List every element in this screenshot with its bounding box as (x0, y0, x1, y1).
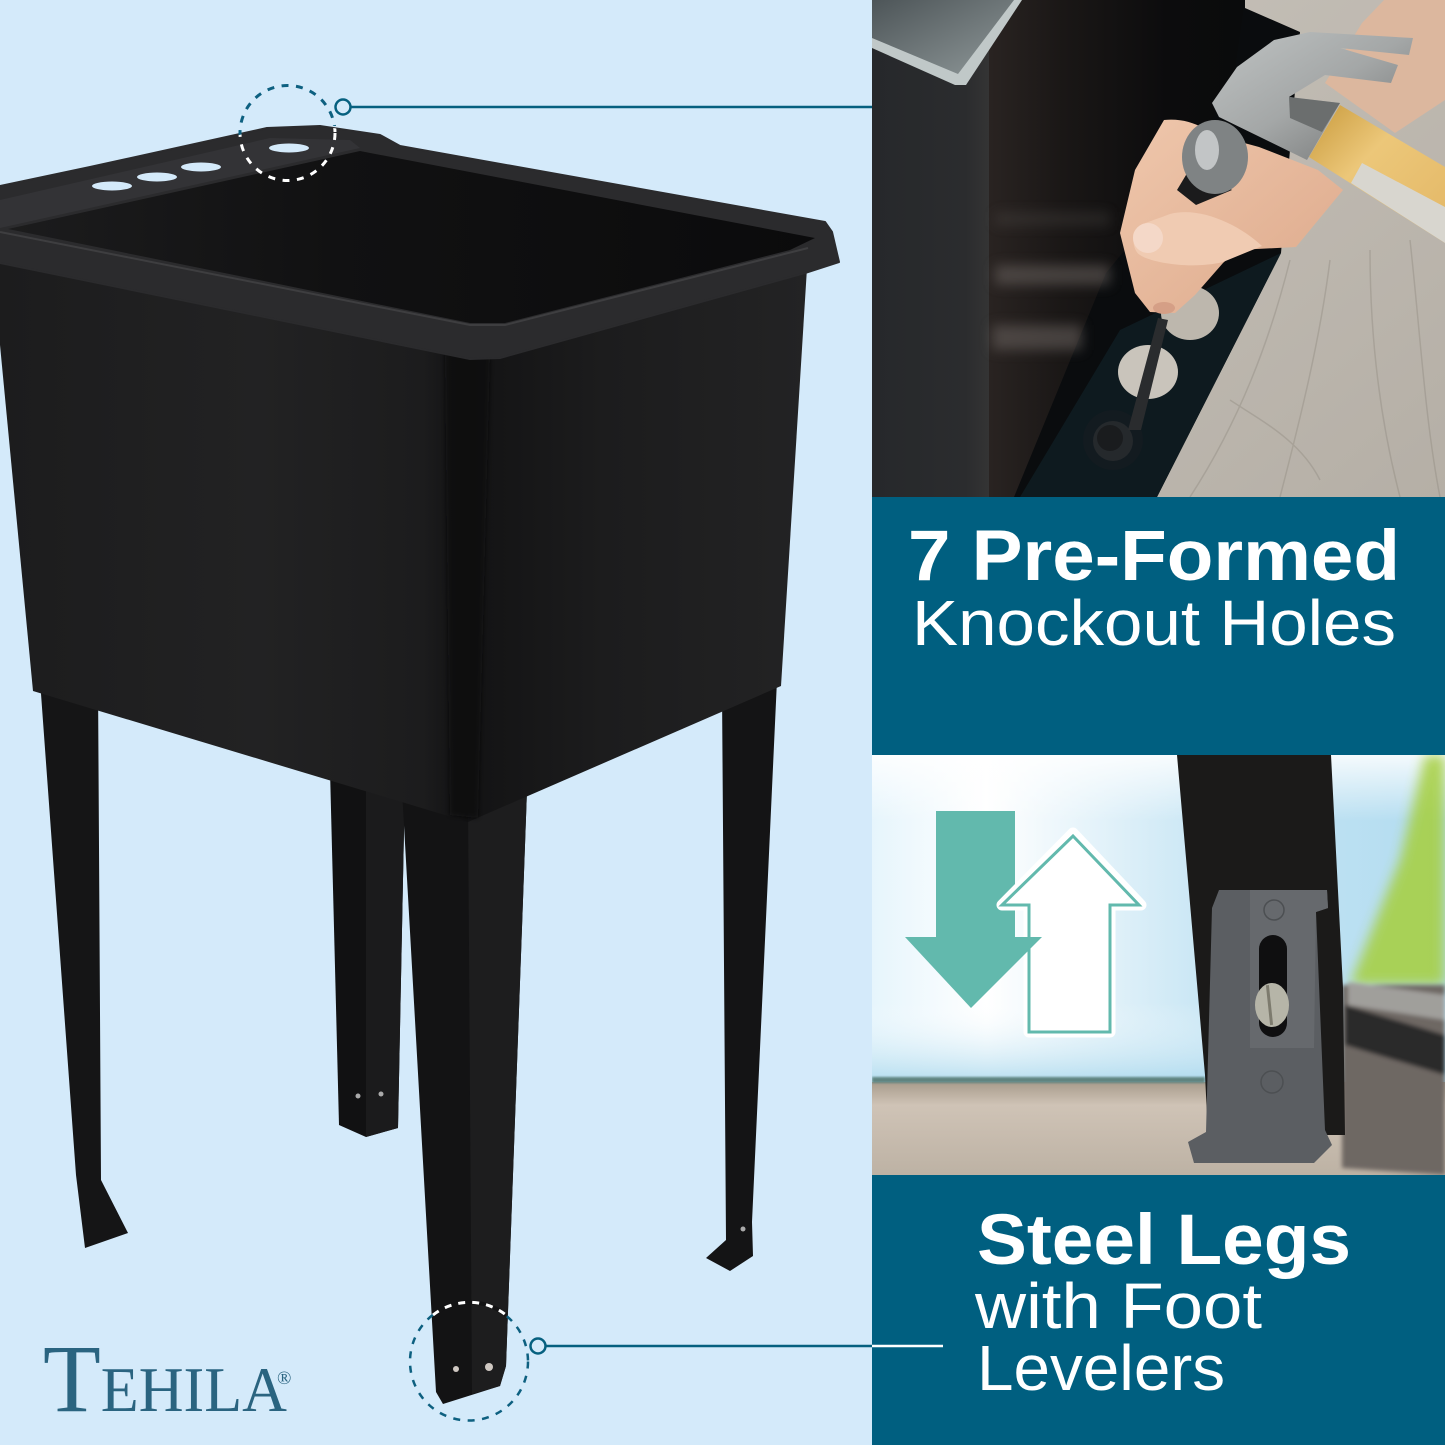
basin inner lip (0, 232, 808, 325)
forearm (1325, 0, 1445, 133)
logo: Tehila: TEHILA (43, 1325, 287, 1432)
cloth (1342, 982, 1445, 1175)
handle label (1351, 163, 1445, 243)
wood grain (1190, 240, 1440, 497)
green grass (1350, 755, 1445, 985)
finger nail (1153, 302, 1175, 314)
callout: top dashed circle (240, 86, 335, 180)
panel: steel legs (872, 1175, 1445, 1445)
subheading: with Foot: with Foot (974, 1270, 1262, 1342)
left leg (40, 680, 128, 1248)
thumb nail (1133, 223, 1163, 253)
panel: knockout holes (872, 497, 1445, 755)
right leg (706, 680, 777, 1271)
rear left leg (330, 770, 405, 1137)
sink product photo (0, 126, 839, 1404)
subheading: Levelers: Levelers (977, 1332, 1225, 1404)
icon: up arrow (1002, 833, 1141, 1032)
basin interior (8, 151, 815, 323)
white connector over panel (872, 1345, 943, 1347)
left post face (872, 0, 989, 497)
chisel handle (1177, 174, 1232, 205)
galvanized corner (872, 0, 1022, 85)
front leg (402, 790, 527, 1404)
logo: registered mark: ® (277, 1368, 291, 1389)
post reflections (992, 212, 1110, 350)
heading: 7 Pre-Formed: 7 Pre-Formed (908, 517, 1400, 596)
tray teal edge (1020, 253, 1281, 497)
tub left face (0, 262, 470, 822)
back deck highlight (0, 138, 360, 228)
heading: Steel Legs: Steel Legs (977, 1201, 1351, 1280)
hand (1120, 120, 1343, 313)
black tray (1014, 0, 1300, 497)
subheading: Knockout Holes: Knockout Holes (912, 587, 1396, 659)
callout: bottom dashed circle (410, 1302, 528, 1420)
icon: down arrow shaft (936, 811, 1015, 937)
callout: top connector (336, 100, 872, 114)
tub right face (468, 268, 807, 822)
tub corner shadow (445, 352, 490, 818)
plastic foot leveler (1188, 890, 1332, 1163)
hammer head and claw (1212, 32, 1413, 160)
icon: down arrow head (905, 937, 1042, 1008)
chisel (1128, 318, 1168, 430)
hammer handle (1309, 105, 1445, 243)
hammer neck (1289, 97, 1340, 132)
rim (0, 126, 839, 359)
leg (1177, 755, 1345, 1135)
black post body (989, 0, 1122, 497)
knockout holes (92, 144, 309, 190)
wooden surface (872, 1082, 1445, 1175)
photo: steel leg with foot leveler (872, 755, 1445, 1175)
photo: hammer and chisel knocking out hole (872, 0, 1445, 497)
thumb (1133, 212, 1262, 265)
callout: bottom connector (530, 1338, 872, 1354)
knockout holes in tray (1093, 288, 1219, 461)
hammer poll (1182, 120, 1248, 194)
